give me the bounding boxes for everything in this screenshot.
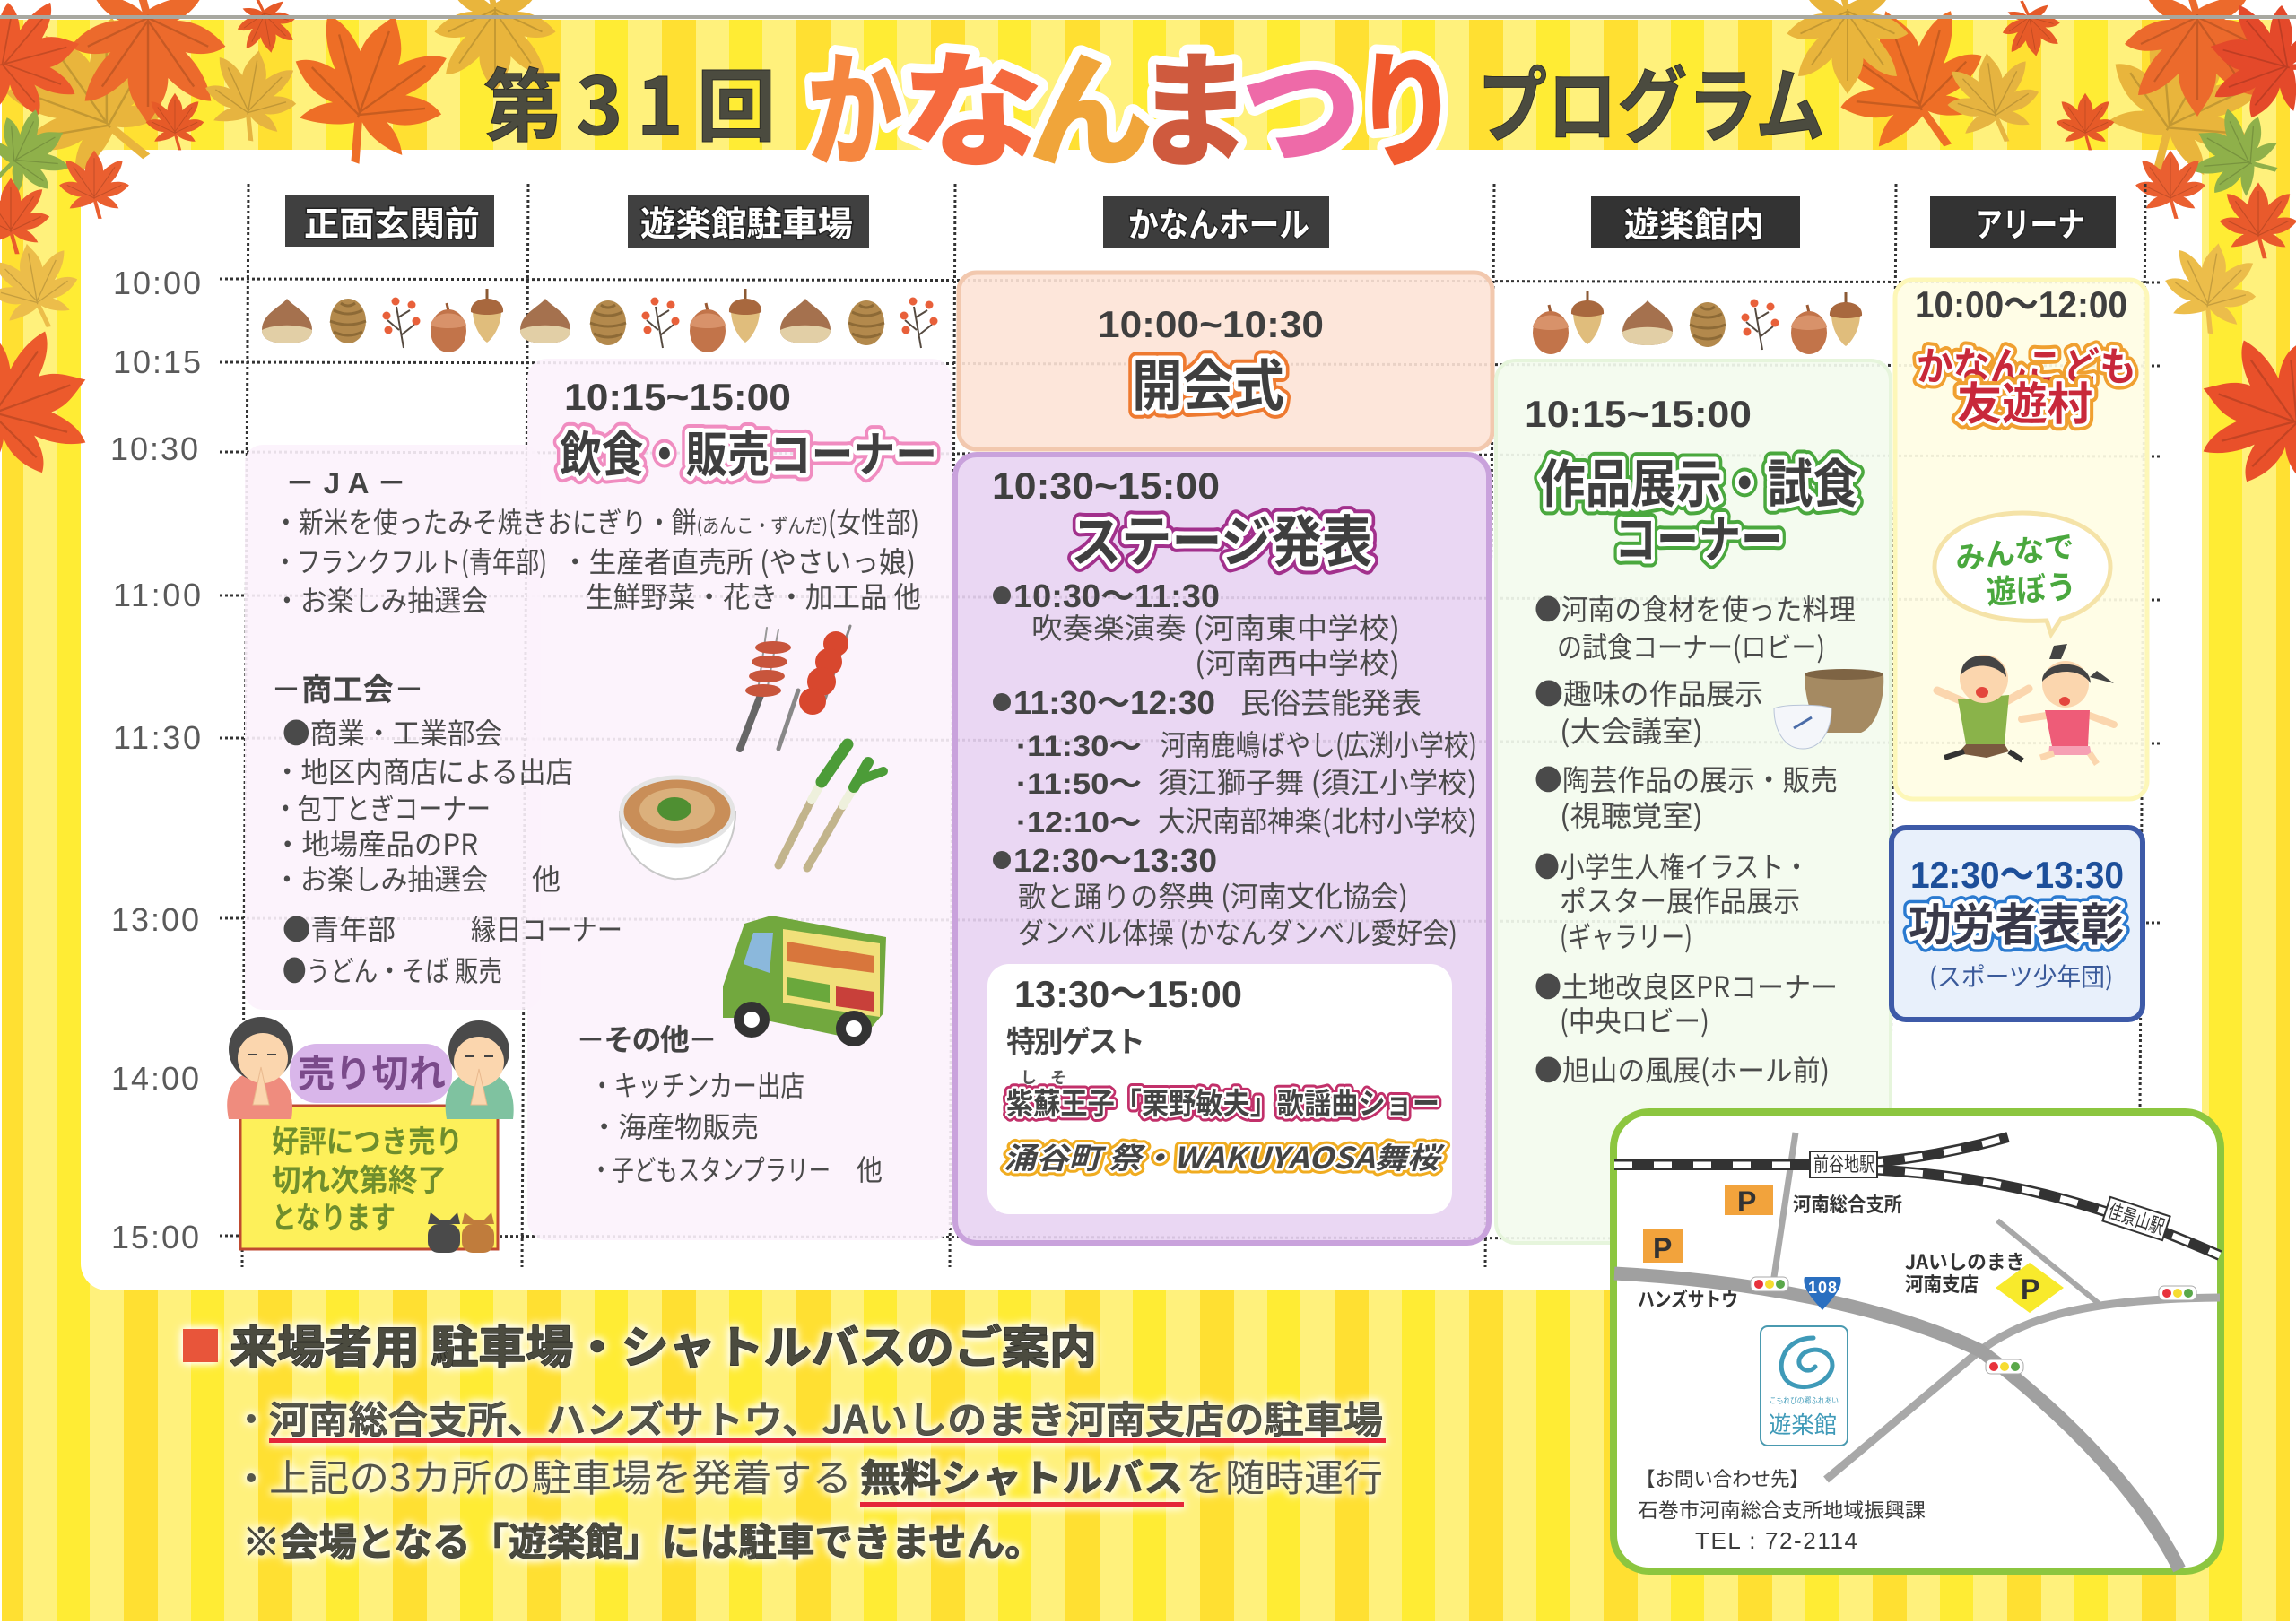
section: 商工会: 他 — [532, 857, 561, 899]
section: JA: ・お楽しみ抽選会 — [274, 578, 488, 620]
time axis labels: 11:00 — [113, 577, 201, 613]
column header: アリーナ — [1930, 196, 2116, 248]
section: JA: ・フランクフルト(青年部) — [274, 540, 547, 581]
section: 商工会: ・地場産品のPR — [274, 822, 478, 864]
exhibition list: (視聴覚室) — [1560, 794, 1703, 835]
heading: ステージ発表: ステージ発表 — [1071, 497, 1372, 578]
white schedule panel — [81, 150, 2202, 1290]
time axis labels: 11:30 — [113, 719, 201, 756]
title logo: かなんまつり: か — [807, 12, 902, 193]
exhibition list: ●旭山の風展(ホール前) — [1535, 1048, 1830, 1090]
panel: 正面玄関前 JA / 商工会 background — [245, 445, 541, 1010]
panel: 開会式 opening ceremony: 開会式 — [1132, 341, 1284, 421]
heading: 飲食・販売コーナー: 飲食・販売コーナー — [560, 415, 937, 486]
map: contact information: TEL : 72-2114 — [1695, 1527, 1857, 1554]
callout: sold-out notice — [227, 1017, 514, 1253]
exhibition list: ●小学生人権イラスト・ — [1535, 845, 1809, 886]
title logo: かなんまつり — [807, 12, 1458, 193]
section: 商工会: ●商業・工業部会 — [283, 711, 502, 752]
stage programme list: ·11:30～ — [1016, 730, 1142, 762]
panel: ステージ発表 stage — [955, 455, 1489, 1243]
time axis labels: 10:00 — [113, 265, 201, 301]
panel: 功労者表彰 awards: (スポーツ少年団) — [1929, 958, 2113, 994]
time: 10:30-15:00 stage: 10:30~15:00 — [992, 465, 1220, 507]
speech bubble: みんなで遊ぼう: 遊ぼう — [1985, 561, 2078, 613]
map: 遊楽館 logo: 遊楽館 — [1769, 1407, 1837, 1440]
map: route 108 shield — [1804, 1277, 1841, 1310]
parking info: line 2: 上記の3カ所の駐車場を発着する — [269, 1448, 852, 1503]
exhibition list: ●陶芸作品の展示・販売 — [1535, 758, 1838, 799]
map: route 108 — [1614, 1273, 2179, 1569]
column header: 正面玄関前: 正面玄関前 — [304, 196, 480, 246]
section: 商工会: ・お楽しみ抽選会 — [274, 857, 488, 899]
stage programme list: (河南西中学校) — [1195, 641, 1400, 682]
section: その他: ・海産物販売 — [590, 1105, 759, 1146]
panel: アリーナ かなんこども友遊村: かなんこども — [1917, 334, 2136, 392]
section: 商工会: －商工会－ — [271, 665, 424, 709]
section: 商工会: ・地区内商店による出店 — [274, 750, 573, 791]
heading: 作品展示・試食コーナー: 作品展示・試食 — [1540, 442, 1858, 517]
time axis labels: 15:00 — [111, 1219, 199, 1255]
heading: ステージ発表: ステージ発表 — [1071, 497, 1372, 578]
exhibition list: の試食コーナー(ロビー) — [1557, 625, 1825, 666]
title logo: かなんまつり: つ — [1241, 12, 1361, 193]
panel: アリーナ かなんこども友遊村: 友遊村 — [1957, 369, 2092, 433]
icon: dogs — [428, 1212, 494, 1253]
icon: green onions — [778, 744, 883, 868]
title: 第31回: 第31回 — [483, 44, 776, 158]
sold-out purple label: 売り切れ — [298, 1044, 446, 1099]
autumn leaves: top-left cluster — [0, 0, 555, 497]
icon: pottery bowl and cup — [1774, 669, 1883, 749]
section: その他: ・子どもスタンプラリー — [590, 1148, 831, 1189]
section: 生産者直売所: ・生産者直売所 (やさいっ娘) — [561, 540, 916, 581]
section: JA — [274, 466, 919, 620]
heading: 作品展示・試食コーナー: 作品展示・試食 — [1540, 442, 1858, 517]
map: place labels — [1638, 1189, 2025, 1313]
stage programme list: ·11:50～ — [1016, 768, 1142, 800]
exhibition list: ポスター展作品展示 — [1560, 879, 1800, 920]
heading: 作品展示・試食コーナー: コーナー — [1614, 498, 1783, 573]
title logo: かなんまつり: ん — [1028, 12, 1153, 193]
stage programme list: 民俗芸能発表 — [1240, 681, 1422, 722]
panel: 開会式 opening ceremony: 10:00~10:30 — [1098, 303, 1324, 345]
panel: 功労者表彰 awards: 功労者表彰 — [1909, 890, 2124, 954]
section: 商工会 — [271, 665, 622, 990]
autumn nuts row: left — [262, 289, 938, 352]
icon: jumping girl — [2022, 644, 2114, 764]
map: contact information — [1636, 1463, 1926, 1554]
exhibition list: (ギャラリー) — [1560, 915, 1692, 956]
panel: 飲食・販売コーナー background — [527, 359, 952, 1240]
section: その他: ・キッチンカー出店 — [590, 1064, 804, 1105]
section: JA: ・新米を使ったみそ焼きおにぎり・餅(あんこ・ずんだ)(女性部) — [274, 500, 919, 542]
stage programme list: ·12:10～ — [1016, 806, 1142, 838]
map: station 佳景山駅 — [2102, 1194, 2171, 1241]
panel: 作品展示・試食コーナー — [1496, 360, 1891, 1243]
time axis labels: 10:30 — [110, 430, 198, 467]
stage programme list: 河南鹿嶋ばやし(広渕小学校) — [1161, 723, 1477, 764]
panel: 功労者表彰 awards — [1892, 828, 2143, 1020]
icon: kitchen car truck — [723, 916, 886, 1046]
heading: 飲食・販売コーナー: 飲食・販売コーナー — [560, 415, 937, 486]
time: 10:15-15:00 exhibition: 10:15~15:00 — [1525, 393, 1752, 435]
exhibition list: (大会議室) — [1560, 709, 1703, 751]
map: station 佳景山駅: 佳景山駅 — [2105, 1195, 2169, 1240]
exhibition list: (中央ロビー) — [1560, 999, 1709, 1040]
stage programme list: 歌と踊りの祭典 (河南文化協会) — [1018, 874, 1408, 916]
column header: 遊楽館内 — [1591, 196, 1800, 248]
time axis labels — [110, 265, 201, 1255]
parking info: line 2: を随時運行 — [1186, 1448, 1383, 1503]
speech bubble: みんなで遊ぼう: みんなで — [1952, 522, 2076, 578]
map: railway lines — [1614, 1137, 2220, 1255]
stage programme list — [993, 578, 1477, 952]
map: 遊楽館 logo — [1761, 1326, 1848, 1446]
section: その他 — [576, 1016, 883, 1189]
exhibition list — [1535, 587, 1856, 1090]
parking info: line 2 — [247, 1448, 1383, 1507]
map: place labels: ハンズサトウ — [1638, 1284, 1738, 1313]
column header: 遊楽館内: 遊楽館内 — [1624, 197, 1764, 247]
time axis labels: 14:00 — [111, 1060, 199, 1097]
callout: sold-out notice: 好評につき売り — [272, 1117, 463, 1161]
parking heading: 来場者用 駐車場・シャトルバスのご案内 — [230, 1312, 1097, 1376]
panel: access map — [1613, 1112, 2221, 1571]
title logo: かなんまつり: な — [900, 12, 1044, 193]
stage programme list: 10:30～11:30 — [1013, 578, 1220, 614]
icon: bowing man — [446, 1020, 514, 1119]
section: 商工会: ●うどん・そば 販売 — [283, 949, 502, 990]
section: その他: 他 — [857, 1148, 883, 1189]
stage programme list: 須江獅子舞 (須江小学校) — [1158, 760, 1477, 802]
parking info: line 3 warning: ※会場となる「遊楽館」には駐車できません。 — [242, 1512, 1043, 1568]
map: place labels: JAいしのまき — [1905, 1246, 2025, 1275]
speech bubble: みんなで遊ぼう — [1935, 513, 2110, 634]
panel: アリーナ かなんこども友遊村: 友遊村 — [1957, 369, 2092, 433]
map: parking JA: P — [2021, 1273, 2039, 1306]
map: side roads — [1774, 1133, 2220, 1480]
panel: 特別ゲスト special guests: しそ — [1021, 1065, 1066, 1089]
map: parking ハンズサトウ: P — [1653, 1232, 1672, 1264]
section: 生産者直売所: 生鮮野菜・花き・加工品 他 — [586, 575, 921, 616]
stage programme list: 12:30～13:30 — [1013, 842, 1217, 879]
map: parking 河南総合支所: P — [1737, 1185, 1756, 1218]
panel: 功労者表彰 awards: 12:30～13:30 — [1910, 854, 2124, 896]
callout: sold-out notice: 切れ次第終了 — [272, 1156, 447, 1200]
panel: アリーナ かなんこども友遊村 — [1895, 280, 2147, 799]
map: parking 河南総合支所 — [1725, 1185, 1773, 1218]
section: その他: －その他－ — [576, 1016, 718, 1059]
parking info: line 1: 河南総合支所、ハンズサトウ、JAいしのまき河南支店の駐車場 — [269, 1390, 1383, 1445]
panel: 特別ゲスト special guests: 涌谷町 祭・WAKUYAOSA舞桜 — [1004, 1134, 1446, 1177]
map: contact information: 石巻市河南総合支所地域振興課 — [1638, 1495, 1926, 1524]
icon: bowing woman — [227, 1017, 293, 1119]
callout: sold-out notice: となります — [272, 1194, 396, 1238]
stage programme list: ダンベル体操 (かなんダンベル愛好会) — [1018, 911, 1457, 952]
section: 商工会: ●青年部 — [283, 908, 396, 949]
panel: 開会式 opening ceremony: 開会式 — [1132, 341, 1284, 421]
column header: かなんホール: かなんホール — [1128, 197, 1309, 247]
panel: 特別ゲスト special guests: 紫蘇王子「栗野敏夫」歌謡曲ショー — [1006, 1080, 1439, 1123]
panel: 開会式 opening ceremony — [959, 273, 1492, 449]
map: contact information: 【お問い合わせ先】 — [1636, 1463, 1809, 1492]
icon: bowl of udon — [620, 777, 735, 879]
map: 遊楽館 logo: こもれびの郷ふれあい — [1770, 1394, 1839, 1406]
stage programme list: 11:30～12:30 — [1013, 684, 1215, 721]
time axis labels: 10:15 — [113, 343, 201, 380]
title logo: かなんまつり: ま — [1135, 12, 1252, 193]
panel: 特別ゲスト special guests: 涌谷町 祭・WAKUYAOSA舞桜 — [1004, 1134, 1446, 1177]
panel: アリーナ かなんこども友遊村: かなんこども — [1917, 334, 2136, 392]
exhibition list: ●河南の食材を使った料理 — [1535, 587, 1856, 629]
scanned page top edge — [0, 15, 2296, 19]
heading: 作品展示・試食コーナー: コーナー — [1614, 498, 1783, 573]
autumn leaves: top-right cluster — [1787, 0, 2296, 506]
map: place labels: 河南支店 — [1905, 1269, 1979, 1298]
map: traffic signals — [1751, 1277, 2196, 1374]
map: place labels: 河南総合支所 — [1793, 1189, 1902, 1218]
icon: jumping boy — [1937, 655, 2029, 760]
time axis labels: 13:00 — [111, 901, 199, 938]
stage programme list: 大沢南部神楽(北村小学校) — [1158, 799, 1477, 840]
parking info: line 2: 無料シャトルバス — [860, 1448, 1184, 1503]
title: プログラム: プログラム — [1477, 40, 1825, 160]
column header: 遊楽館駐車場: 遊楽館駐車場 — [640, 196, 853, 246]
panel: 功労者表彰 awards: 功労者表彰 — [1909, 890, 2124, 954]
panel: アリーナ かなんこども友遊村: 10:00～12:00 — [1915, 283, 2127, 326]
title logo: かなんまつり: り — [1354, 12, 1458, 193]
exhibition list: ●土地改良区PRコーナー — [1535, 965, 1838, 1006]
map: parking JA — [1996, 1263, 2064, 1313]
panel: 特別ゲスト special guests: 13:30～15:00 — [1014, 973, 1242, 1015]
icon: skewers — [740, 626, 850, 749]
dotted timetable grid — [220, 184, 2161, 1267]
column header: アリーナ: アリーナ — [1975, 197, 2085, 247]
panel: 特別ゲスト special guests — [987, 964, 1452, 1214]
section: 生産者直売所 — [561, 540, 921, 616]
section: 商工会: 縁日コーナー — [471, 908, 622, 949]
heading: 作品展示・試食コーナー — [1540, 442, 1858, 573]
section: 商工会: ・包丁とぎコーナー — [274, 786, 491, 828]
map: station 前谷地駅: 前谷地駅 — [1813, 1149, 1874, 1177]
map: route 108 shield: 108 — [1808, 1279, 1837, 1297]
stage programme list: 吹奏楽演奏 (河南東中学校) — [1031, 606, 1400, 647]
exhibition list: ●趣味の作品展示 — [1535, 672, 1763, 713]
autumn nuts row: right — [1533, 291, 1862, 354]
panel: 特別ゲスト special guests: 特別ゲスト — [1006, 1018, 1145, 1061]
time: 10:15-15:00 food corner: 10:15~15:00 — [564, 376, 791, 418]
section: JA: － J A － — [285, 466, 406, 499]
map: parking ハンズサトウ — [1643, 1229, 1683, 1264]
panel: 特別ゲスト special guests: 紫蘇王子「栗野敏夫」歌謡曲ショー — [1006, 1080, 1439, 1123]
